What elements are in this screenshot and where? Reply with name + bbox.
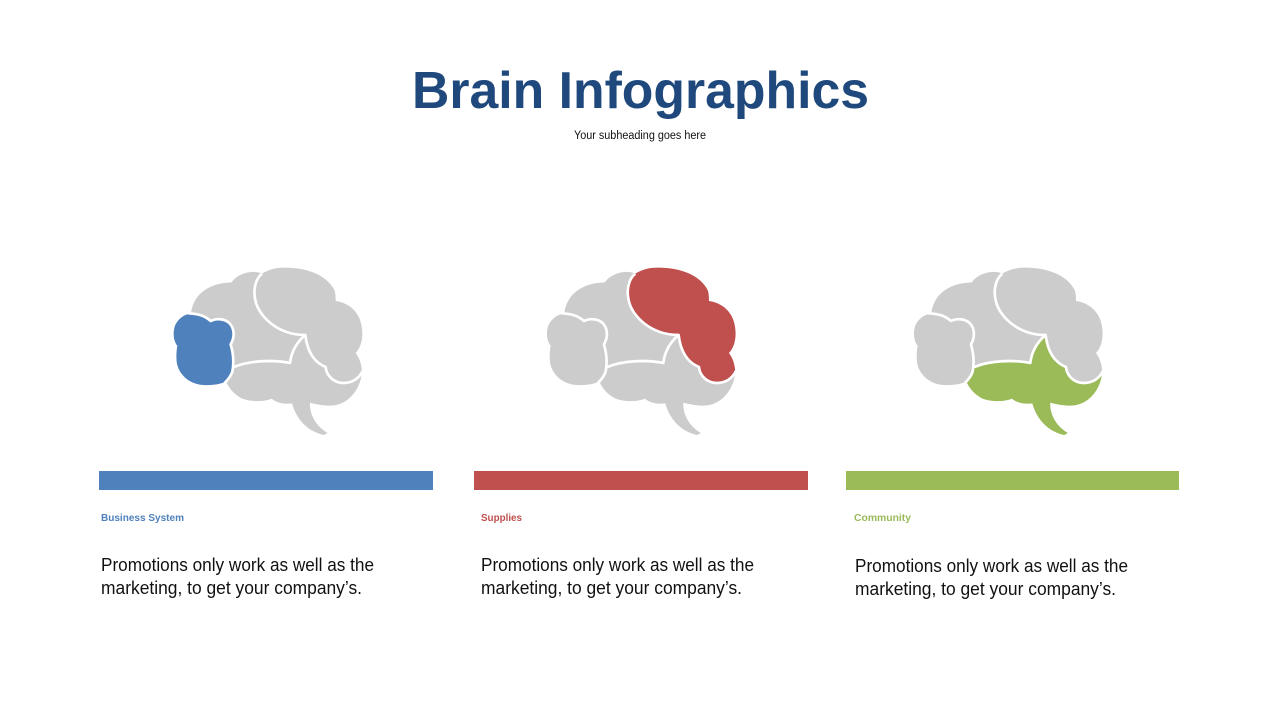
column 3: community <box>846 471 1179 599</box>
lobe: top right, red <box>628 268 736 383</box>
lobe: left <box>914 314 974 385</box>
bar: red <box>474 471 808 490</box>
body text <box>481 555 754 598</box>
lobe: top right <box>254 268 362 383</box>
body text: marketing, to get your company’s. <box>101 578 362 598</box>
body text: Promotions only work as well as the <box>101 555 374 575</box>
lobe: left, blue <box>174 314 234 385</box>
lobe: top left <box>564 272 679 367</box>
bar: blue <box>99 471 433 490</box>
body text: Promotions only work as well as the <box>855 556 1128 576</box>
lobe: top left <box>191 272 305 367</box>
label: Supplies <box>481 512 522 524</box>
title: Brain Infographics <box>412 62 869 120</box>
body text: marketing, to get your company’s. <box>855 579 1116 599</box>
lobe: top right <box>995 268 1103 383</box>
body text: marketing, to get your company’s. <box>481 578 742 598</box>
column 1: business system <box>99 471 433 598</box>
lobe: bottom <box>226 335 362 435</box>
lobe: top left <box>931 272 1046 367</box>
label: Business System <box>101 512 184 524</box>
body text <box>855 556 1128 599</box>
subheading: Your subheading goes here <box>574 130 706 142</box>
brain icon: blue highlight <box>174 268 363 435</box>
brain icon: green highlight <box>914 268 1103 435</box>
lobe: bottom <box>599 335 735 435</box>
bar: green <box>846 471 1179 490</box>
lobe: bottom, green <box>966 335 1102 435</box>
body text: Promotions only work as well as the <box>481 555 754 575</box>
brain icon: red highlight <box>547 268 736 435</box>
lobe: left <box>547 314 607 385</box>
body text <box>101 555 374 598</box>
column 2: supplies <box>474 471 808 598</box>
label: Community <box>854 512 911 524</box>
